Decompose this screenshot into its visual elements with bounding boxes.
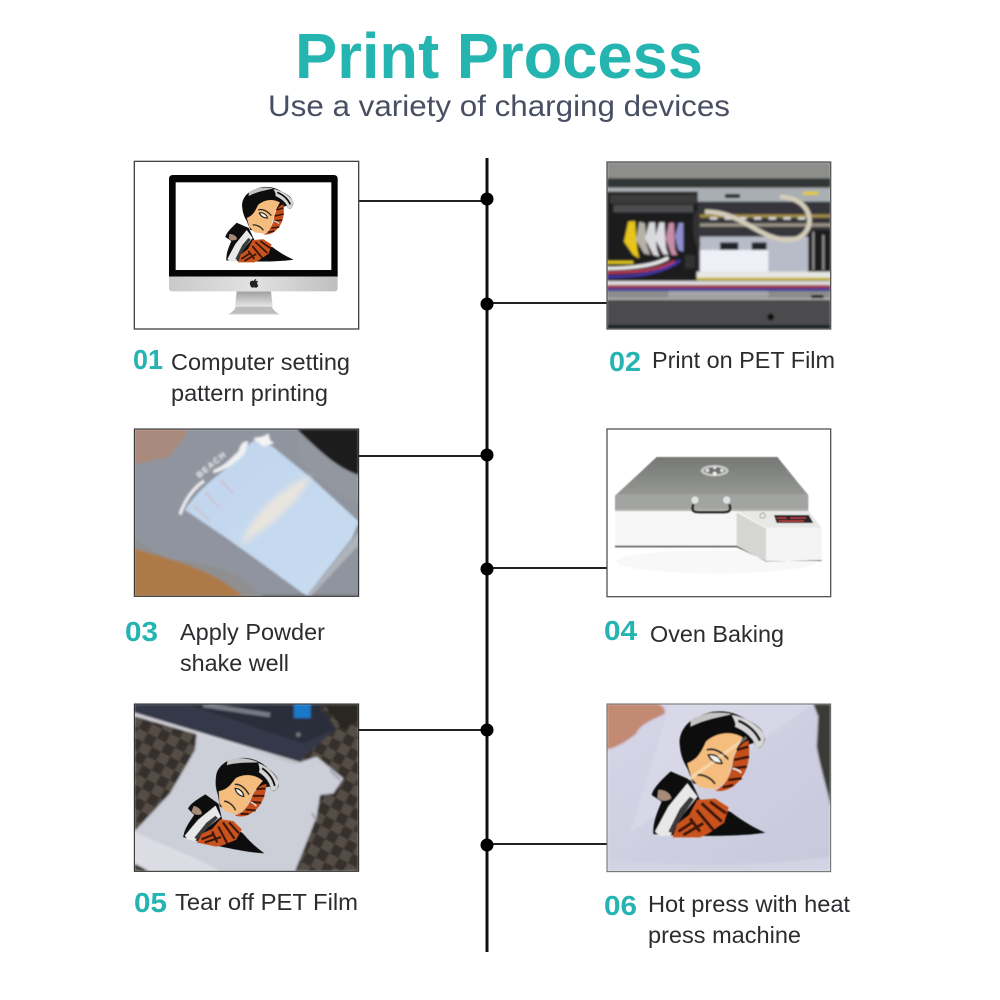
step 03 label: Apply Powder (180, 619, 325, 645)
panel: step 02 printer carriage photo (607, 162, 831, 329)
cartoon portrait on shirt (652, 711, 765, 837)
step 02 label: 02 (609, 346, 641, 377)
step 06 label: press machine (648, 922, 801, 948)
step 05 label: 05 (134, 887, 167, 918)
subtitle: Use a variety of charging devices (268, 90, 730, 123)
step 03 label (125, 616, 325, 676)
panel: step 03 powder film photo (134, 429, 360, 596)
panel: step 05 t-shirt under heat press photo (134, 704, 359, 871)
central timeline with connectors (358, 158, 607, 952)
monitor stand (228, 291, 279, 315)
step 03 label: 03 (125, 616, 158, 647)
step 04 label: Oven Baking (650, 621, 784, 647)
step 02 label: Print on PET Film (652, 347, 835, 373)
panel: step 03 powder film photo: BEACH (194, 449, 228, 480)
step 05 label: Tear off PET Film (175, 889, 358, 915)
step 06 label: 06 (604, 890, 637, 921)
step 06 label (604, 890, 850, 948)
step 02 label (609, 346, 835, 377)
cartoon portrait on shirt (183, 758, 279, 854)
step 03 label: shake well (180, 650, 289, 676)
step 05 label (134, 887, 358, 918)
step 04 label: 04 (604, 615, 637, 646)
step 06 label: Hot press with heat (648, 891, 850, 917)
panel: step 06 hot pressed shirt photo (607, 704, 831, 872)
step 04 label (604, 615, 784, 647)
panel: step 04 oven photo (607, 429, 831, 597)
title: Print Process (295, 20, 703, 92)
monitor body (169, 175, 338, 291)
step 01 label: Computer setting (171, 349, 350, 375)
step 01 label: 01 (133, 344, 163, 375)
step 01 label: pattern printing (171, 380, 328, 406)
panel: step 01 computer monitor (134, 161, 359, 329)
cartoon portrait on screen (225, 187, 294, 262)
step 01 label (133, 344, 350, 406)
